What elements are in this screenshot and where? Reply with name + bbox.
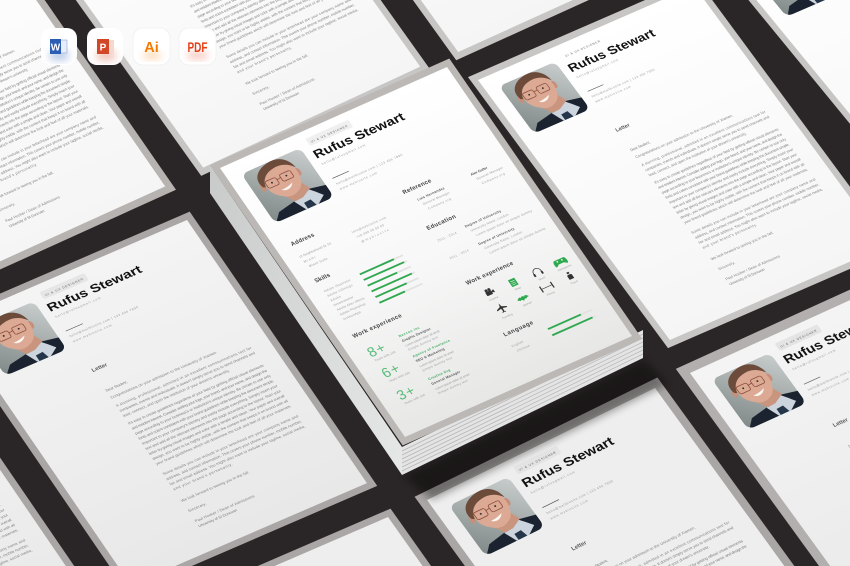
section: skills: Adobe Illustrator [323, 279, 352, 293]
text block: top-middle letter body: Paul Hooker / Dean of Admissions [259, 77, 316, 106]
section: education: 2011 - 2014 [449, 249, 470, 260]
header: lower-left name block: www.mybiosite.com [72, 324, 113, 343]
icon: PowerPoint [87, 28, 123, 65]
icon: PDF [179, 28, 216, 65]
section: skills: Adobe After effects [336, 297, 366, 312]
header: name block: Rufus Stewart [311, 110, 408, 161]
section: work experience timeline: Years with Job [404, 393, 426, 406]
text block: top-middle letter body: address, and contact information. This covers your phone number, mobile number, [229, 3, 356, 64]
header: upper-right name block: hello@rufusgmail.com [576, 59, 619, 79]
page: bottom blank sheet [142, 509, 586, 566]
icon: gamepad: Videogames [557, 263, 573, 272]
page: lower-left letter [0, 212, 377, 566]
header: bottom-center name block: www.mybiosite.com [550, 499, 589, 521]
section: skills: InVisionApp [343, 311, 362, 321]
text block: lower-left letter body: Dear Student, [105, 380, 129, 393]
text block: lower-left letter body: text and add all the relevant elements into the page according to the layout. Start your [145, 389, 282, 451]
text block: upper-right letter body: We look forward to seeing you in the fall. [710, 231, 775, 261]
text block: upper-right letter body: Sincerely, [717, 261, 736, 271]
section: education: Degree of University [464, 209, 503, 229]
section: interests icons [464, 240, 585, 324]
text block: upper-right letter body: design, you want to be highly visible, with the content that keeps it on brand with all [679, 163, 805, 220]
heading: lower-right letter: Letter [831, 416, 849, 428]
page: bottom-left corner letter [0, 336, 104, 566]
text block: upper-right letter body: It's easy to create guidelines regardless of your field by getting official visual elements [653, 128, 780, 185]
section: reference: Reference [401, 178, 433, 196]
text block: top-middle letter body [189, 0, 390, 111]
text block: top-left letter body: University of St Donovan [8, 209, 46, 229]
header: lower-right name block: www.mybiosite.com [811, 377, 850, 397]
text block: lower-left letter body: fonts and colors consistent with your brand guidelines while keeping the document simple. [138, 379, 275, 441]
section: work experience timeline: Agency of Freelance [412, 339, 451, 359]
header: lower-right name block [773, 304, 850, 398]
section: address: @mybiosite [360, 229, 390, 244]
text block: lower-left letter body: letter by giving visual images and color with a simple and clean. Your paper and overall [148, 394, 286, 456]
section: education: 2011 - 2014 [437, 231, 458, 243]
text block: upper-right letter body: Paul Hooker / Dean of Admissions [725, 254, 781, 281]
text block: top-left letter body: Paul Hooker / Dean of Admissions [4, 195, 61, 223]
chart: language bars [547, 309, 596, 336]
header: upper-right name block: UI & UX DESIGNER [564, 40, 602, 58]
header: lower-left name block: UI & UX DESIGNER [44, 278, 85, 297]
header: name block: www.mybiosite.com [339, 172, 378, 191]
heading: lower-left letter: Letter [90, 362, 109, 373]
section: work experience timeline [351, 302, 476, 411]
header: bottom-center name block: hello@mailbiosite.com | 123 456 7890 [546, 480, 614, 515]
text block: lower-left letter body: page according to your business's or institution's unique identity. Be certain to use only [134, 374, 272, 436]
icon: bat: Batman [522, 300, 533, 307]
text block: bottom-center letter body [586, 504, 748, 566]
header: lower-right name block: hello@rufusgmail.com [792, 349, 837, 371]
heading: upper-right letter: Letter [614, 122, 631, 133]
text block: lower-left letter body [105, 331, 336, 528]
icon: video camera: Cinema [488, 295, 499, 302]
text block: lower-left letter body: and your brand's personality. [172, 462, 234, 491]
header: upper-right name block [560, 20, 680, 104]
text block: lower-left letter body: and resident interest. Consider adding your logo, your brand, and your name, and design the [131, 369, 269, 431]
icon: plane: Traveling [501, 313, 513, 320]
page: top-middle letter [6, 0, 430, 176]
section: work experience timeline: Years with Job [374, 350, 397, 363]
section: work experience timeline: Simple dummy text [422, 356, 454, 373]
text block: upper-right letter body: fax and email address. You might also want to include your tagline, social media, [698, 187, 824, 245]
section: work experience timeline: Simple dummy text [437, 379, 469, 395]
text block: upper-right letter body: address, and contact information. This covers your phone number, mobile number, [694, 182, 820, 240]
page: top blank sheet [261, 0, 684, 60]
section: work experience timeline: Creative Org [427, 368, 452, 381]
header: name block: hello@mailbiosite.com | 123 456 7890 [335, 154, 403, 186]
section: education: Degree of University [477, 227, 516, 246]
header: upper-right name block: www.mybiosite.com [595, 85, 632, 104]
text block: lower-left letter body: your brand guidelines which will determine the look and feel of all your materials. [155, 404, 293, 466]
shadow: stack on lower sheet [404, 360, 668, 500]
text block: top-middle letter body: University of St Donovan [262, 91, 300, 111]
section: work experience timeline: General Manager [430, 370, 462, 386]
section: address: Address [289, 232, 316, 248]
text block: lower-left letter body: design, you want to be highly visible, with the content that keeps it on brand with all [151, 399, 289, 461]
header: lower-right name block: UI & UX DESIGNER [780, 329, 818, 349]
page: top-left letter [0, 0, 176, 294]
text block: top-middle letter body: We look forward to seeing you in the fall. [244, 53, 309, 86]
header: bottom-center name block [511, 424, 640, 522]
text block: upper-right letter body: your brand guidelines which will determine the look and feel of all your materials. [683, 167, 809, 225]
section: education: University Name, London [484, 231, 523, 250]
header: lower-left name block: Rufus Stewart [44, 263, 145, 314]
stack: left paper edge [210, 165, 402, 475]
photo: top-right portrait [748, 0, 844, 18]
text block: upper-right letter body: page according to your business's or institution's unique identity. Be certain to use only [661, 137, 788, 195]
stack: right paper edge [402, 330, 643, 475]
section: skills: Adobe Photoshop [339, 302, 367, 317]
section: education [425, 186, 547, 271]
text block: upper-right letter body: text and add all the relevant elements into the page according to the layout. Start your [672, 153, 798, 210]
text block: lower-left letter body: University of St Donovan [198, 508, 239, 528]
header: name block: hello@rufusgmail.com [321, 144, 366, 166]
section: work experience timeline: Lorem ipsum dolor sit amet [434, 373, 471, 391]
text block: bottom-left letter body [0, 503, 37, 566]
text block: lower-left letter body: address, and contact information. This covers your phone number, mobile number, [165, 419, 303, 481]
text block: upper-right letter body: A stunning, professional, admitted in an excellent communications tool for [640, 110, 767, 167]
section: skills: Skills [313, 272, 332, 284]
text block: upper-right letter body: University of St Donovan [728, 267, 766, 286]
header: upper-right name block: Rufus Stewart [565, 27, 658, 75]
text block: upper-right letter body: Some details you can include in your letterhead are your company name and [690, 177, 817, 235]
section: address [289, 203, 395, 270]
text block: lower-left letter body: fax and email address. You might also want to include your tagline, social media, [169, 424, 306, 486]
icon: Word [41, 28, 77, 65]
header: name block: UI & UX DESIGNER [310, 124, 349, 144]
section: reference: General Manager [422, 191, 451, 206]
section: skills: Adobe [330, 295, 342, 303]
icon: dumbbell: Fitness [546, 290, 556, 296]
section: language: English [511, 340, 524, 348]
text block: lower-left letter body: It's easy to create guidelines regardless of your field by getting official visual elements [127, 364, 265, 426]
section: language [502, 296, 597, 354]
header: lower-left name block: hello@rufusgmail.com [55, 297, 102, 319]
section: reference: Luis Hernandez [416, 186, 446, 202]
section: work experience timeline: Lorem ipsum dolor sit amet [405, 329, 441, 348]
section: interests icons: Work experience [464, 260, 515, 287]
text block: lower-left letter body: companies, events and individuals. It doesn't simply serve you to send channels and [119, 351, 256, 413]
section: address: +10 000 00 00 00 [356, 224, 385, 239]
section: work experience timeline: Lorem ipsum dolor sit amet [419, 350, 455, 368]
icon: PowerPoint: P [100, 42, 107, 54]
section: skills: Dreamweaver [333, 296, 355, 307]
section: education: University Name, London [470, 213, 510, 233]
file format badges [41, 28, 216, 65]
section: education: Lorem ipsum dolor sit simple dummy [475, 209, 533, 237]
text block: lower-left letter body: We look forward to seeing you in the fall. [180, 470, 251, 503]
photo: center portrait [241, 147, 336, 224]
icon: Illustrator: Ai [144, 40, 159, 56]
text block: lower-left letter body: Paul Hooker / Dean of Admissions [194, 494, 255, 523]
header: name block [304, 100, 429, 192]
header: bottom-center name block: Rufus Stewart [519, 435, 617, 490]
section: address: 12 Neighborhood St. 54 [298, 242, 332, 259]
section: work experience timeline: 3+ [393, 383, 418, 403]
page: top-right corner resume [716, 0, 850, 231]
panel: center resume [210, 59, 642, 445]
header: bottom-center name block: hello@rufusgmail.com [530, 471, 576, 495]
text block: lower-left letter body: Congratulations on your admission to the University of Xiamen. [110, 350, 218, 400]
photo: lower-left portrait [0, 301, 69, 377]
text block: lower-left letter body: Sincerely, [187, 502, 207, 513]
page: upper-right letter [468, 0, 850, 348]
section: education: Lorem ipsum dolor sit simple dummy [489, 227, 547, 255]
chart: skill bars [359, 254, 423, 304]
section: work experience timeline: 6+ [378, 360, 403, 381]
text block: top-middle letter body: fax and email address. You might also want to include your tagline, social media, [233, 8, 359, 69]
text block: upper-right letter body: companies, events and individuals. It doesn't simply serve you to send channels and [644, 115, 771, 172]
section: skills: Adobe InDesign [327, 284, 354, 298]
section: language: Chinese [516, 344, 531, 353]
section: address: Miami Suite [308, 257, 329, 268]
section: work experience timeline: Graphic Designer [401, 327, 432, 343]
section: work experience timeline: SEO & Marketing [415, 347, 446, 363]
section: work experience timeline: Nexxon Inc [398, 326, 421, 338]
photo: upper-right portrait [499, 61, 592, 135]
section: reference: Alex Cutter [470, 166, 489, 177]
section: work experience timeline: Simple dummy text [407, 336, 439, 352]
text block: upper-right letter body: and your brand's personality. [701, 223, 758, 250]
text block: upper-right letter body: lead, connect, and open the institution of your dream's university. [648, 132, 748, 177]
text block: top-left letter body [0, 36, 135, 229]
page: bottom-center letter [415, 377, 850, 566]
text block: lower-left letter body: A stunning, professional, admitted in an excellent communications tool for [115, 346, 253, 408]
photo: bottom-center portrait [449, 476, 547, 557]
section: address: info@mybiosite.com [351, 216, 387, 234]
section: reference [401, 150, 508, 215]
text block: lower-left letter body: Some details you can include in your letterhead are your company name and [162, 414, 300, 476]
text block: upper-right letter body [629, 95, 850, 286]
section: skills [313, 242, 424, 322]
photo: lower-right portrait [712, 352, 808, 431]
text block: lower-left letter body: Important to your company's identity and easily include everything. Simply insert your [141, 384, 279, 446]
icon: Word: W [51, 42, 61, 54]
section: reference: General Manager [476, 166, 504, 181]
text block: upper-right letter body: Congratulations on your admission to the University of Xiamen. [635, 114, 735, 159]
section: work experience timeline: 8+ [364, 340, 389, 360]
icon: PDF: PDF [188, 39, 208, 55]
icon: bottle: Travel [570, 279, 579, 285]
heading: bottom-center letter: Letter [570, 539, 588, 552]
section: work experience timeline: Work experience [351, 312, 403, 340]
section: education: Education [425, 213, 458, 232]
header: lower-left name block: hello@mailbiosite.com | 123 456 7890 [69, 306, 139, 338]
text block: lower-left letter body: lead, connect, and open the institution of your dream's university. [122, 369, 231, 418]
icon: Illustrator [133, 28, 170, 65]
header: lower-left name block [38, 253, 165, 344]
header: upper-right name block: hello@mailbiosite.com | 123 456 7890 [591, 68, 656, 99]
text block: upper-right letter body: and resident interest. Consider adding your logo, your brand, and your name, and design the [657, 132, 784, 190]
text block: upper-right letter body: Important to your company's identity and easily include everything. Simply insert your [668, 148, 794, 205]
section: reference: Company.org [427, 197, 452, 211]
text block: top-middle letter body: Sincerely, [252, 85, 271, 96]
icon: book: Read [514, 286, 522, 291]
section: work experience timeline: Years with Job [388, 371, 411, 383]
section: language: Language [502, 319, 535, 338]
section: reference: Company.org [481, 172, 506, 185]
text block: upper-right letter body: letter by giving visual images and color with a simple and clean. Your paper and overall [676, 158, 802, 215]
section: address: Miami [303, 256, 317, 264]
icon: headphones: Music [538, 275, 547, 281]
header: bottom-center name block: UI & UX DESIGNER [518, 451, 557, 472]
text block: upper-right letter body: Dear Student, [629, 140, 652, 152]
text block: top-middle letter body: and your brand's personality. [236, 46, 293, 74]
text block: upper-right letter body: fonts and colors consistent with your brand guidelines while keeping the document simple. [664, 142, 791, 200]
page: lower-right letter [676, 259, 850, 566]
